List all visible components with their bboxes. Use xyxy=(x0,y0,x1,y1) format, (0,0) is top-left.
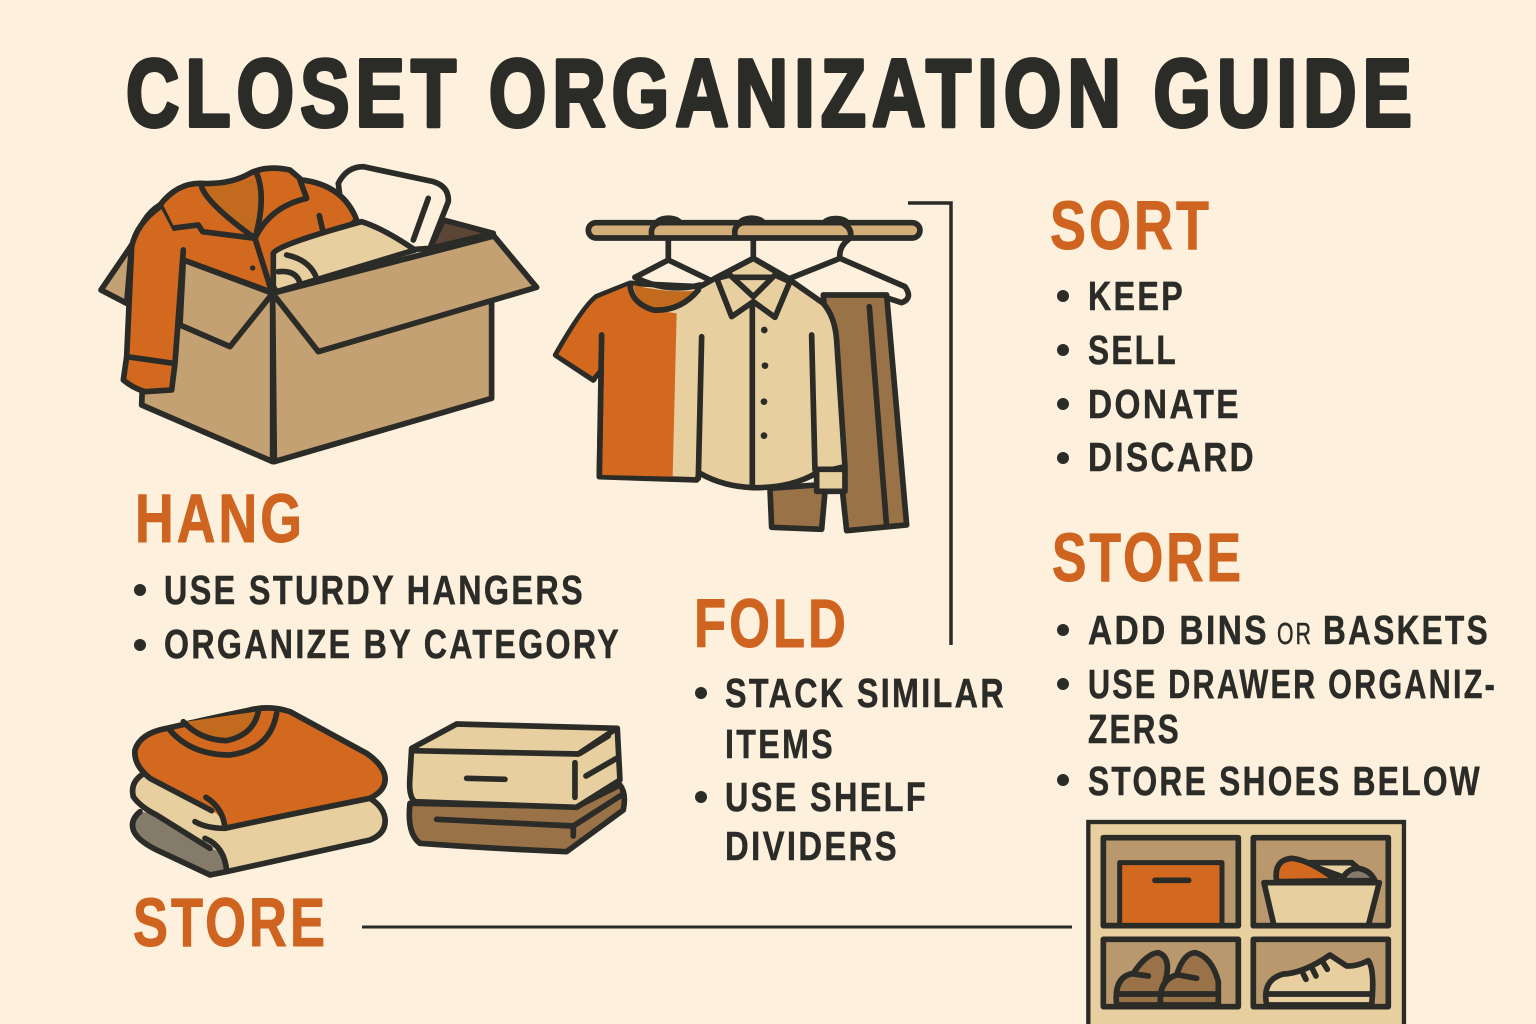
connector line: store to shelf xyxy=(362,926,1072,928)
section: fold: DIVIDERS xyxy=(725,823,899,869)
heading: store, bottom left: STORE xyxy=(133,884,328,961)
grey bottom layer xyxy=(132,812,227,875)
icon: folded clothes stacks xyxy=(132,708,624,875)
section: store, right: OR xyxy=(1277,616,1313,651)
section: sort xyxy=(1050,187,1256,480)
section: fold: USE SHELF xyxy=(725,774,928,820)
hangers xyxy=(635,240,908,303)
cream middle layer xyxy=(133,775,385,872)
cell: box xyxy=(1103,838,1238,926)
section: store, right: BASKETS xyxy=(1323,607,1490,653)
section: hang xyxy=(134,480,621,667)
heading: sort: SORT xyxy=(1050,187,1212,264)
section: fold: STACK SIMILAR xyxy=(725,670,1006,716)
icon: hanging clothes on rail xyxy=(556,215,920,531)
cell: sneaker xyxy=(1253,939,1388,1007)
section: hang: USE STURDY HANGERS xyxy=(164,567,585,613)
section: sort: DONATE xyxy=(1088,381,1241,427)
section: fold: ITEMS xyxy=(725,721,835,767)
section: store, right: ADD BINS xyxy=(1088,607,1269,653)
section: store, right: ZERS xyxy=(1088,706,1181,752)
section: fold xyxy=(694,585,1006,869)
section: sort: DISCARD xyxy=(1088,434,1256,480)
collar xyxy=(717,275,790,317)
rail xyxy=(588,223,920,238)
heading: hang: HANG xyxy=(135,480,305,557)
orange sweater xyxy=(135,708,385,828)
tee and shirt body xyxy=(556,258,845,488)
section: sort: KEEP xyxy=(1088,273,1185,319)
trousers xyxy=(770,295,907,531)
heading: fold: FOLD xyxy=(694,585,849,662)
tan box fold xyxy=(409,785,624,852)
heading: store: STORE xyxy=(1052,519,1244,596)
cell: brown shoes xyxy=(1103,939,1238,1007)
section: hang: ORGANIZE BY CATEGORY xyxy=(164,621,621,667)
section: store, right xyxy=(1052,519,1497,804)
bracket line: top right of rail xyxy=(908,203,951,645)
icon: open box with clothes xyxy=(101,167,537,462)
cell: basket xyxy=(1253,838,1388,926)
icon: storage shelf xyxy=(1088,822,1404,1024)
section: sort: SELL xyxy=(1088,327,1178,373)
